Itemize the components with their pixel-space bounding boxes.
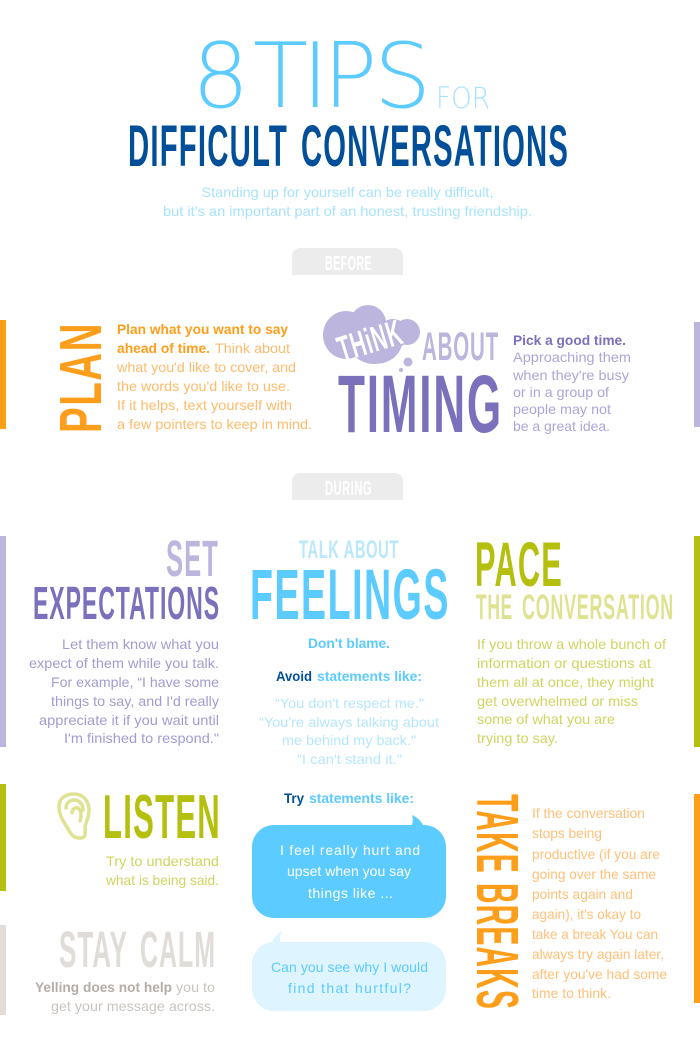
title line: 8 TIPS: 8TIPS: [192, 24, 431, 129]
timing text: or in a group of: [513, 384, 609, 400]
take breaks text: going over the same: [532, 866, 656, 882]
plan text: ahead of time.: [117, 340, 210, 356]
title: 8 tips for difficult conversations: [128, 24, 569, 179]
avoid quotes: “I can't stand it.": [297, 751, 402, 767]
heading: set: SET: [166, 530, 219, 587]
speech bubble: question: Can you see why I would: [271, 959, 428, 975]
plan text: a few pointers to keep in mind.: [117, 416, 312, 432]
speech bubble: hurt: [252, 815, 446, 918]
expectations text: appreciate it if you wait until: [39, 712, 219, 728]
timing text: Pick a good time.: [513, 332, 626, 348]
avoid quotes: “You're always talking about: [259, 714, 439, 730]
plan text: Plan what you want to say: [117, 321, 288, 337]
label: avoid statements: Avoid: [276, 668, 312, 684]
panel: stay calm: [35, 921, 216, 1014]
panel: set expectations: [29, 530, 220, 746]
plan text: what you'd like to cover, and: [116, 359, 296, 375]
title word: FOR: FOR: [436, 81, 490, 115]
stay calm text: Yelling does not help: [35, 979, 172, 995]
heading: the conversation: [476, 588, 674, 627]
avoid quotes: me behind my back.": [282, 732, 416, 748]
stay calm text: get your message across.: [51, 998, 215, 1014]
take breaks text: productive (if you are: [532, 846, 660, 862]
tab: during: [292, 473, 403, 500]
side bar: pace: [694, 536, 700, 747]
side bar: stay calm: [0, 925, 6, 1015]
take breaks text: take a break You can: [532, 926, 658, 942]
pace text: information or questions at: [477, 655, 651, 671]
cloud word: think: THiNK: [332, 311, 407, 370]
label: try statements: statements like:: [309, 790, 414, 806]
pace text: get overwhelmed or miss: [477, 693, 638, 709]
label: avoid statements: statements like:: [317, 668, 422, 684]
take breaks text: again), it's okay to: [532, 906, 641, 922]
side bar: plan: [0, 320, 6, 429]
take breaks text: after you've had some: [532, 966, 667, 982]
pace text: them all at once, they might: [477, 674, 654, 690]
expectations text: expect of them while you talk.: [29, 655, 219, 671]
timing text: [512, 332, 631, 434]
icon: thought cloud: [323, 305, 420, 372]
pace text: [477, 636, 666, 746]
plan text: If it helps, text yourself with: [117, 397, 292, 413]
panel: pace the conversation: [475, 530, 674, 746]
icon: ear: [59, 794, 89, 838]
side bar: timing: [694, 322, 700, 427]
intro text: but it's an important part of an honest, trusting friendship.: [163, 203, 532, 219]
take breaks text: [532, 805, 667, 1001]
heading: timing: TIMING: [338, 359, 503, 450]
plan text: the words you'd like to use.: [117, 378, 290, 394]
expectations text: Let them know what you: [62, 636, 219, 652]
heading: listen: LISTEN: [103, 783, 221, 852]
stay calm text: you to: [176, 979, 215, 995]
tab: during: DURING: [325, 478, 372, 500]
side bar: listen: [0, 784, 6, 891]
infographic: CALM: [140, 921, 216, 978]
heading: plan: PLAN: [48, 322, 114, 433]
heading: about: ABOUT: [422, 325, 499, 369]
avoid quotes: “You don't respect me.": [275, 695, 424, 711]
expectations text: I'm finished to respond.": [64, 730, 219, 746]
plan text: Think about: [215, 340, 290, 356]
panel: pace the conversation: PACE: [475, 530, 563, 600]
take breaks text: If the conversation: [532, 805, 645, 821]
avoid quotes: [259, 695, 439, 767]
timing text: be a great idea.: [513, 418, 610, 434]
take breaks text: stops being: [532, 825, 602, 841]
panel: take breaks: [464, 794, 667, 1010]
timing text: when they're busy: [512, 367, 629, 383]
expectations text: things to say, and I'd really: [51, 693, 219, 709]
plan text: [116, 321, 312, 432]
take breaks text: points again and: [532, 886, 633, 902]
speech bubble: hurt: things like ...: [308, 885, 393, 901]
panel: plan: [48, 321, 312, 433]
speech bubble: question: find that hurtful?: [288, 980, 411, 996]
title line: difficult conversations: DIFFICULT: [128, 114, 288, 179]
tab: before: BEFORE: [325, 253, 372, 275]
timing text: people may not: [513, 401, 611, 417]
intro text: Standing up for yourself can be really difficult,: [202, 184, 494, 200]
heading: stay calm: STAY: [59, 921, 128, 978]
listen text: Try to understand: [106, 853, 219, 869]
heading: feelings: FEELINGS: [250, 556, 450, 635]
take breaks text: always try again later,: [532, 946, 664, 962]
pace text: If you throw a whole bunch of: [477, 636, 666, 652]
callout: don't blame: Don't blame.: [308, 635, 390, 651]
expectations text: [29, 636, 219, 746]
pace text: trying to say.: [477, 730, 558, 746]
heading: talk about: TALK ABOUT: [299, 536, 399, 564]
panel: think about timing: [323, 305, 631, 450]
label: try statements: Try: [284, 790, 304, 806]
listen text: [105, 853, 219, 888]
pace text: some of what you are: [477, 711, 615, 727]
speech bubble: question: [252, 931, 446, 1011]
speech bubble: hurt: I feel really hurt and: [280, 842, 420, 858]
intro text: [163, 184, 532, 219]
panel: talk about feelings: [250, 536, 450, 767]
side bar: take breaks: [694, 794, 700, 1003]
speech bubble: hurt: upset when you say: [287, 863, 411, 879]
stay calm text: [35, 979, 215, 1014]
heading: expectations: EXPECTATIONS: [33, 577, 220, 629]
listen text: what is being said.: [105, 872, 219, 888]
panel: listen: [59, 783, 221, 888]
timing text: Approaching them: [513, 349, 631, 365]
panel: try statements: [252, 790, 446, 1011]
tab: before: [292, 248, 403, 275]
expectations text: For example, “I have some: [51, 674, 219, 690]
heading: the conversation: THE: [476, 588, 513, 627]
side bar: set expectations: [0, 536, 6, 747]
take breaks text: time to think.: [532, 985, 611, 1001]
